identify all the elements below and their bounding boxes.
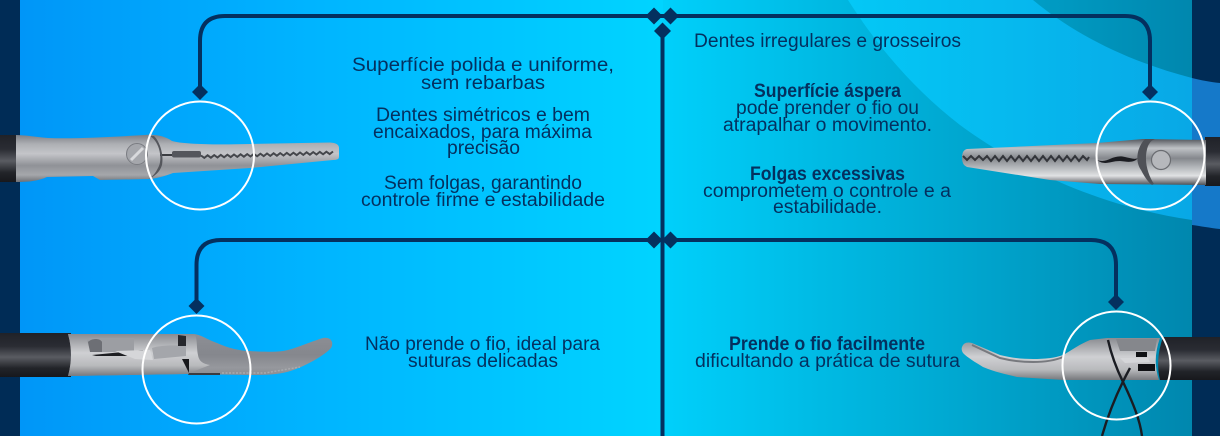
- text: top right problems: Superfície áspera: [754, 81, 901, 102]
- tool: polished needle holder (top left): [0, 135, 339, 182]
- text: top right problems: pode prender o fio ou: [736, 98, 919, 119]
- text: bottom left benefit: Não prende o fio, ideal para: [365, 334, 600, 355]
- text: top right problems: [694, 31, 961, 218]
- background: light blue curved band: [848, 0, 1192, 220]
- text: bottom left benefit: [365, 334, 600, 372]
- text: top left benefits: encaixados, para máxima: [373, 122, 592, 143]
- text: bottom left benefit: suturas delicadas: [408, 351, 558, 372]
- text: top right problems: Dentes irregulares e grosseiros: [694, 31, 961, 52]
- suture thread: [1102, 340, 1142, 436]
- text: top right problems: estabilidade.: [773, 197, 882, 218]
- text: bottom right problem: [695, 334, 960, 372]
- connector lines and diamonds: [188, 8, 1158, 436]
- text: top left benefits: Dentes simétricos e bem: [376, 105, 590, 126]
- text: bottom right problem: Prende o fio facilmente: [729, 334, 925, 355]
- tool: smooth curved jaw (bottom left): [0, 333, 332, 377]
- text: top right problems: comprometem o controle e a: [703, 181, 951, 202]
- text: top left benefits: precisão: [447, 138, 520, 159]
- tool: serrated curved jaw with suture thread (bottom right): [962, 337, 1220, 436]
- left dark side bar: [0, 0, 20, 436]
- right side bar blue band: [1192, 78, 1220, 229]
- text: top left benefits: sem rebarbas: [421, 73, 545, 94]
- text: top left benefits: Superfície polida e uniforme,: [352, 55, 614, 76]
- text: top right problems: atrapalhar o movimento.: [723, 115, 932, 136]
- text: top left benefits: [352, 55, 614, 211]
- zoom circles: [142, 102, 1204, 424]
- text: top left benefits: Sem folgas, garantindo: [384, 173, 582, 194]
- text: top left benefits: controle firme e estabilidade: [361, 190, 605, 211]
- text: top right problems: Folgas excessivas: [750, 164, 905, 185]
- text: bottom right problem: dificultando a prática de sutura: [695, 351, 960, 372]
- tool: irregular needle holder (top right): [962, 137, 1220, 186]
- background: right panel gradient: [663, 0, 1192, 436]
- right dark side bar: [1192, 0, 1220, 436]
- background: left panel gradient: [20, 0, 663, 436]
